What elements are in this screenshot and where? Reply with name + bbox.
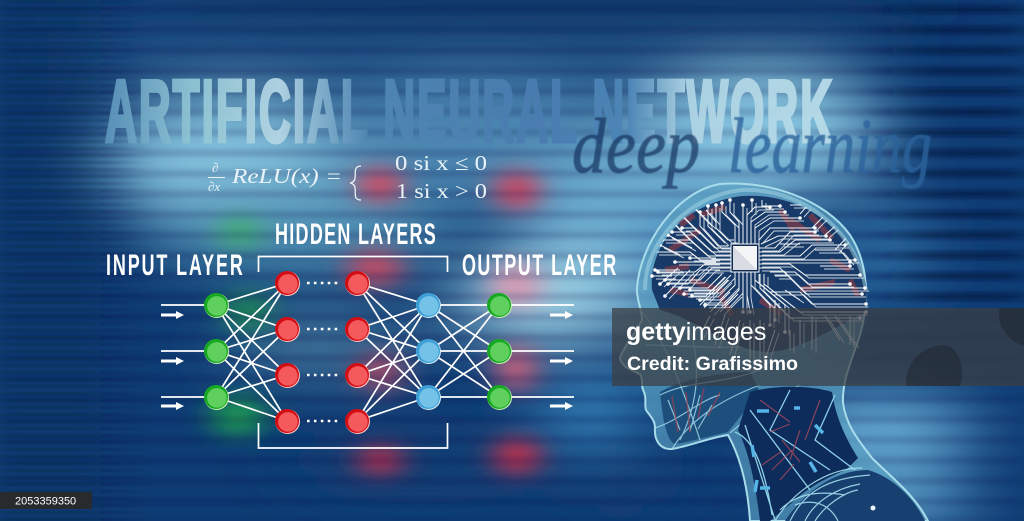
credit: Credit: Grafissimo [627,354,798,375]
image id: 2053359350 [15,496,76,508]
neck details [735,390,855,520]
watermark band [612,308,1024,386]
heading: hidden layers: HIDDEN LAYERS [275,219,436,251]
connections [161,283,574,421]
formula: 0 si x ≤ 0 [395,151,487,175]
title: ARTIFICIAL NEURAL NETWORK [105,62,832,160]
hidden nodes 2 [345,271,370,434]
formula: ∂ [212,160,218,175]
subtitle: deep learning: learning [728,102,932,189]
formula: 1 si x > 0 [396,179,487,203]
subtitle: deep learning: deep [572,102,700,189]
formula: ReLU(x) = [231,164,342,188]
output nodes [487,293,512,410]
bottom bracket [258,423,448,448]
subtitle: deep learning [572,102,932,189]
circuit duplicate traces [656,203,870,373]
face mesh [640,310,800,449]
hidden nodes 3 [416,293,441,410]
neural network diagram [161,256,574,448]
heading: input layer: INPUT LAYER [106,250,243,282]
input arrows [161,311,184,410]
head silhouette [620,183,928,521]
shoulder mesh [775,468,870,521]
output arrows [550,311,573,410]
heading: output layer: OUTPUT LAYER [462,250,616,282]
brain circuit [652,200,870,373]
neck interior [738,387,858,521]
brain mottling [665,207,858,315]
formula: ∂x [208,179,220,194]
brain glass rim [645,190,866,290]
ellipsis dots [307,283,338,421]
formula [208,151,487,203]
getty logo: gettyimages [626,318,766,346]
image id [0,492,92,509]
head illustration [620,183,928,521]
face interior [660,372,760,444]
brain base [652,196,867,352]
input nodes [204,293,229,410]
top bracket [258,256,448,272]
microchip [731,244,759,272]
hidden nodes 1 [275,271,300,434]
band shapes [906,308,1024,386]
shoulder [785,470,925,521]
